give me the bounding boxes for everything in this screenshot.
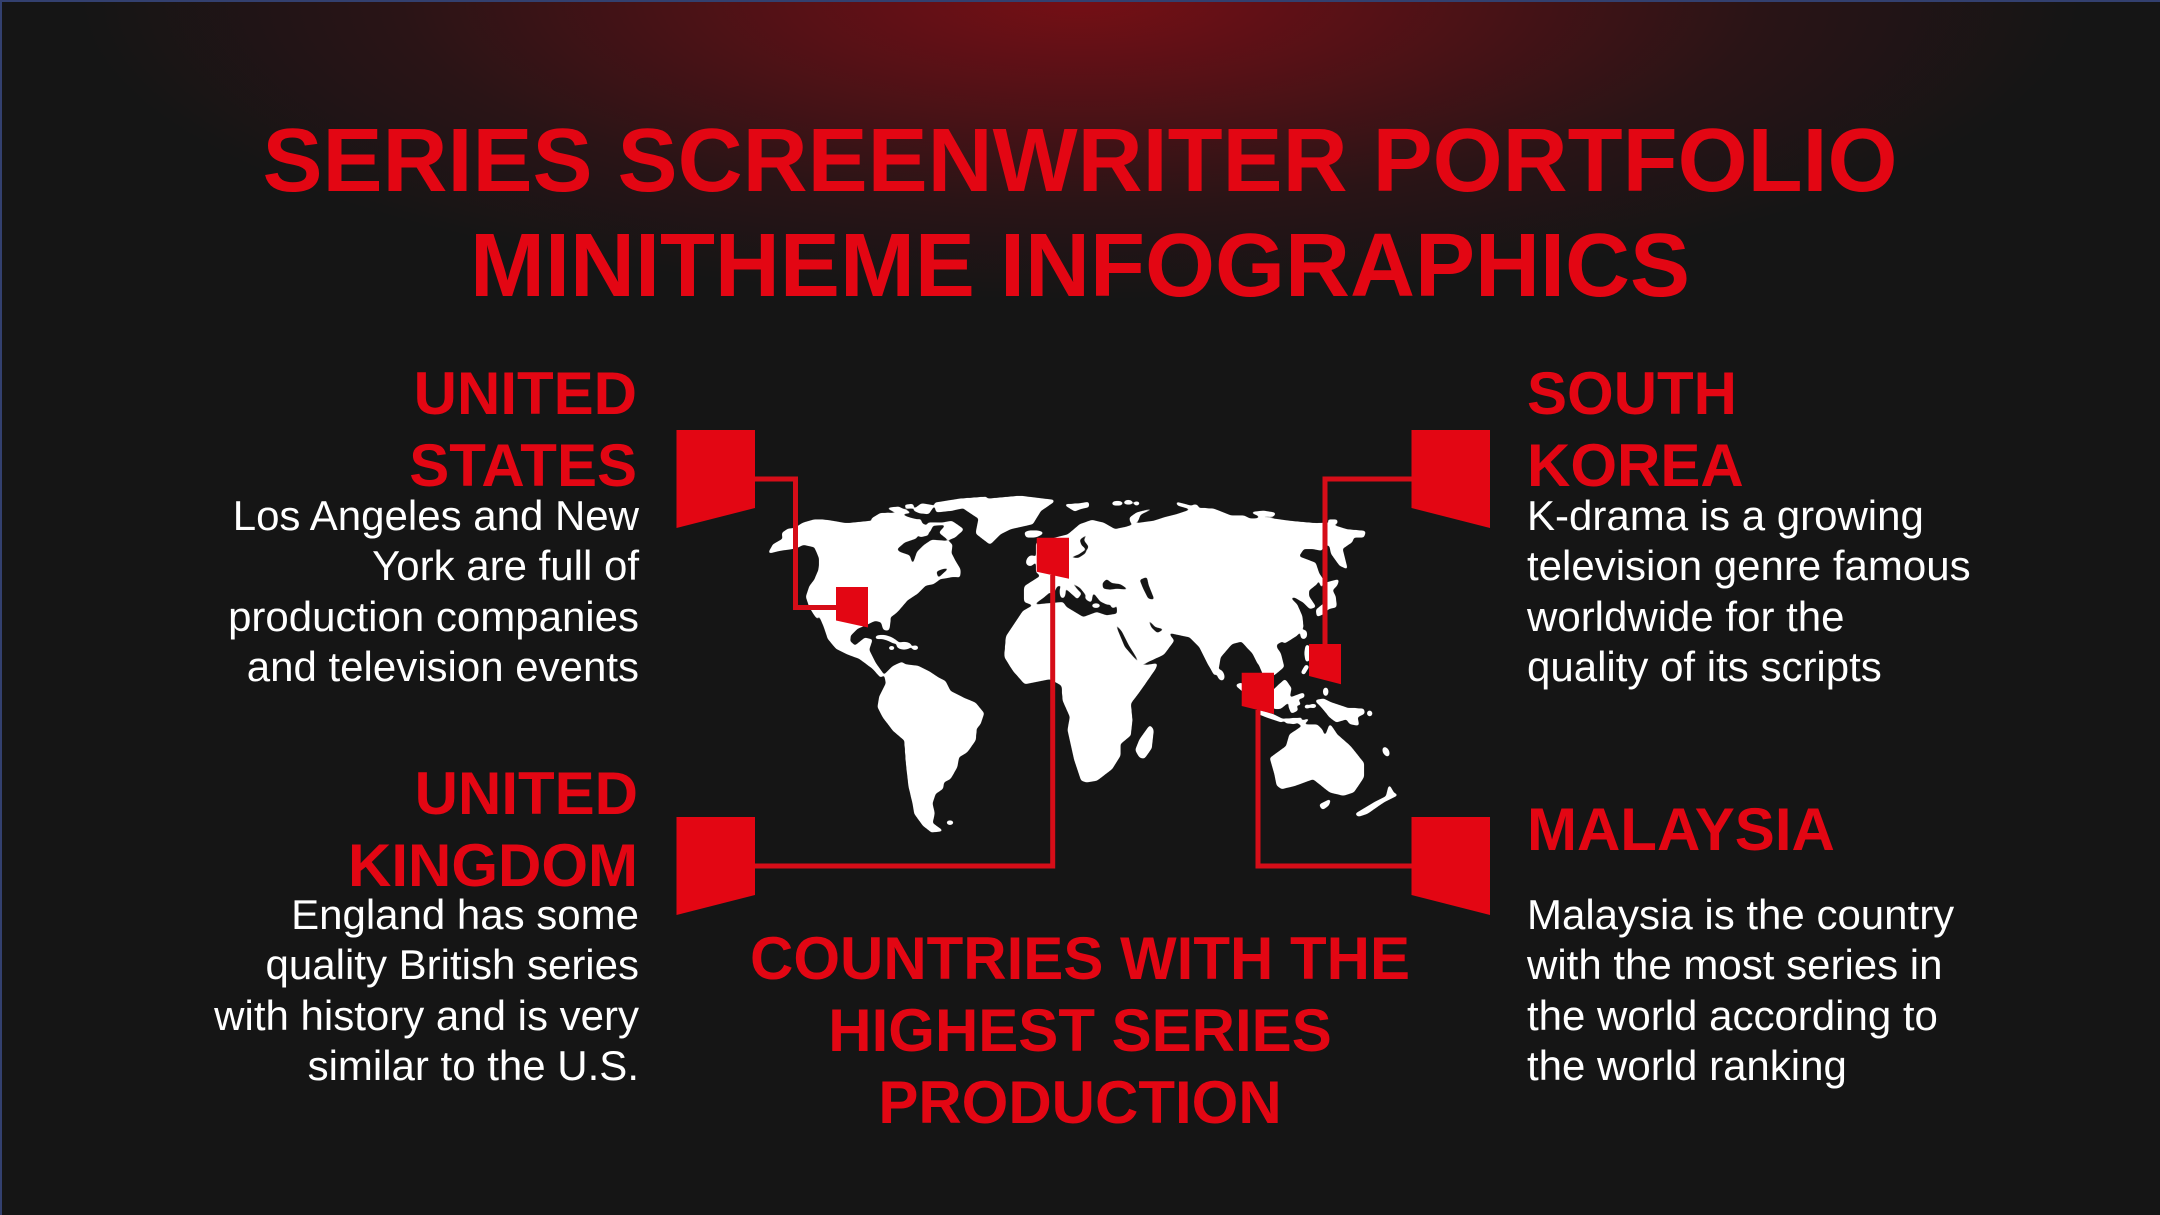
text: South Korea <box>1526 492 1971 690</box>
text: South Korea: worldwide for the <box>1527 593 1844 640</box>
center caption: PRODUCTION <box>878 1069 1282 1136</box>
map marker: United States <box>836 587 868 628</box>
text: United Kingdom: with history and is very <box>214 992 639 1039</box>
map marker: South Korea <box>1309 644 1341 684</box>
center caption: COUNTRIES WITH THE <box>750 925 1410 992</box>
americas north <box>769 497 987 677</box>
title <box>262 110 1898 316</box>
connector: South Korea <box>1325 479 1412 646</box>
world map <box>769 497 1397 832</box>
madagascar <box>1136 726 1153 758</box>
text: United Kingdom <box>214 891 639 1089</box>
text: United States: Los Angeles and New <box>233 492 639 539</box>
title: MINITHEME INFOGRAPHICS <box>470 216 1690 316</box>
connector: United States <box>755 479 838 608</box>
heading: United Kingdom: KINGDOM <box>348 832 638 899</box>
text: United States <box>228 492 640 690</box>
flag: United Kingdom <box>676 817 755 915</box>
flag: Malaysia <box>1412 817 1490 915</box>
connector: United Kingdom <box>755 575 1053 866</box>
connector: Malaysia <box>1258 710 1412 866</box>
panel: United States <box>228 360 640 690</box>
text: South Korea: quality of its scripts <box>1527 643 1882 690</box>
heading: South Korea <box>1527 360 1744 499</box>
text: United Kingdom: England has some <box>291 891 639 938</box>
panel: United Kingdom <box>214 760 639 1089</box>
text: South Korea: K-drama is a growing <box>1527 492 1924 539</box>
text: Malaysia: with the most series in <box>1527 941 1942 988</box>
panel: South Korea <box>1526 360 1971 690</box>
greenland <box>965 497 1053 543</box>
text: United States: production companies <box>228 593 639 640</box>
text: Malaysia <box>1526 891 1954 1089</box>
center caption <box>750 925 1410 1136</box>
center caption: HIGHEST SERIES <box>828 997 1332 1064</box>
text: South Korea: television genre famous <box>1527 542 1971 589</box>
title: SERIES SCREENWRITER PORTFOLIO <box>262 110 1898 210</box>
flag: South Korea <box>1412 430 1490 528</box>
text: United States: and television events <box>247 643 639 690</box>
text: Malaysia: the world ranking <box>1527 1042 1847 1089</box>
heading: United Kingdom <box>348 760 638 899</box>
panel: Malaysia <box>1526 796 1954 1089</box>
south america <box>878 663 983 832</box>
text: Malaysia: Malaysia is the country <box>1527 891 1954 938</box>
heading: United States <box>409 360 637 499</box>
mediterranean <box>1035 585 1117 617</box>
eurasia and africa <box>1005 501 1365 782</box>
heading: United States: UNITED <box>414 360 637 427</box>
heading: United Kingdom: UNITED <box>415 760 638 827</box>
heading: South Korea: SOUTH <box>1527 360 1737 427</box>
map marker: Malaysia <box>1242 673 1274 714</box>
text: Malaysia: the world according to <box>1527 992 1938 1039</box>
text: United Kingdom: quality British series <box>266 941 639 988</box>
map marker: United Kingdom <box>1037 538 1069 579</box>
flag: United States <box>676 430 755 528</box>
indonesia and oceania <box>1237 660 1397 816</box>
heading: Malaysia: MALAYSIA <box>1527 796 1835 863</box>
text: United States: York are full of <box>372 542 639 589</box>
heading: South Korea: KOREA <box>1527 432 1744 499</box>
text: United Kingdom: similar to the U.S. <box>308 1042 639 1089</box>
heading: United States: STATES <box>409 432 637 499</box>
